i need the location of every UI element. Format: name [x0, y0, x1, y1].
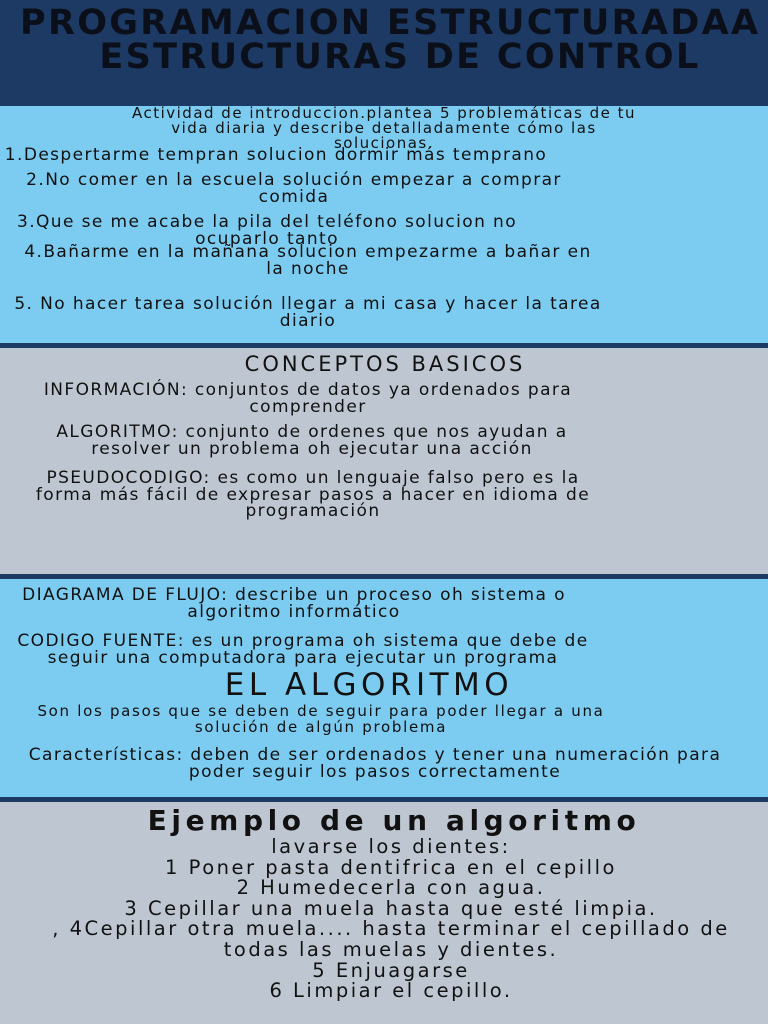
caracteristicas: poder seguir los pasos correctamente [189, 762, 561, 782]
panel: basic concepts [0, 348, 768, 575]
problem 2 [26, 170, 562, 206]
algoritmo [56, 422, 568, 458]
heading: ejemplo: Ejemplo de un algoritmo [148, 804, 640, 837]
example steps [52, 835, 730, 1002]
heading: conceptos basicos: CONCEPTOS BASICOS [245, 352, 525, 376]
example steps: 5 Enjuagarse [312, 959, 470, 982]
example steps: 1 Poner pasta dentifrica en el cepillo [165, 856, 617, 879]
problem 4: la noche [266, 258, 350, 278]
problem 2: 2.No comer en la escuela solución empezar a comprar [26, 170, 562, 190]
problem 4 [24, 242, 592, 278]
pseudocodigo: programación [245, 501, 381, 521]
panel: flow diagram and algorithm [0, 579, 768, 798]
panel: algorithm example [0, 802, 768, 1024]
problem 5: 5. No hacer tarea solución llegar a mi casa y hacer la tarea [14, 294, 602, 314]
codigo fuente: CODIGO FUENTE: es un programa oh sistema que debe de [17, 631, 589, 651]
codigo fuente [17, 631, 589, 668]
problem 3: 3.Que se me acabe la pila del teléfono solucion no [17, 212, 517, 232]
algoritmo: resolver un problema oh ejecutar una acción [91, 438, 533, 458]
example steps: todas las muelas y dientes. [224, 938, 558, 961]
problem 5 [14, 294, 602, 330]
problem 3: ocuparlo tanto [195, 228, 339, 248]
heading: el algoritmo: EL ALGORITMO [225, 667, 513, 703]
caracteristicas: Características: deben de ser ordenados y tener una numeración para [29, 745, 721, 765]
definition [37, 702, 605, 736]
intro text: vida diaria y describe detalladamente cómo las [171, 119, 597, 137]
problem 4: 4.Bañarme en la mañana solucion empezarme a bañar en [24, 242, 592, 262]
problem 3 [17, 212, 517, 248]
diagrama de flujo: DIAGRAMA DE FLUJO: describe un proceso oh sistema o [22, 585, 566, 605]
diagrama de flujo: algoritmo informático [187, 602, 401, 622]
panel: introduction activity [0, 106, 768, 344]
codigo fuente: seguir una computadora para ejecutar un programa [48, 648, 558, 668]
intro text [132, 104, 636, 152]
definition: Son los pasos que se deben de seguir para poder llegar a una [37, 702, 605, 720]
definition: solución de algún problema [195, 718, 447, 736]
pseudocodigo: PSEUDOCODIGO: es como un lenguaje falso pero es la [46, 468, 580, 488]
example steps: lavarse los dientes: [271, 835, 511, 858]
header panel [0, 0, 768, 106]
informacion: comprender [249, 396, 367, 416]
example steps: 6 Limpiar el cepillo. [269, 979, 513, 1002]
intro text: Actividad de introduccion.plantea 5 problemáticas de tu [132, 104, 636, 122]
problem 5: diario [280, 310, 336, 330]
caracteristicas [29, 745, 721, 782]
title [20, 3, 760, 77]
informacion: INFORMACIÓN: conjuntos de datos ya ordenados para [44, 380, 572, 400]
title: ESTRUCTURAS DE CONTROL [99, 37, 701, 77]
pseudocodigo: forma más fácil de expresar pasos a hacer en idioma de [36, 484, 590, 504]
problem 2: comida [259, 186, 329, 206]
title: PROGRAMACION ESTRUCTURADAA [20, 3, 760, 43]
example steps: 3 Cepillar una muela hasta que esté limpia. [124, 897, 658, 920]
diagrama de flujo [22, 585, 566, 622]
intro text: solucionas. [334, 134, 434, 152]
algoritmo: ALGORITMO: conjunto de ordenes que nos ayudan a [56, 422, 568, 442]
pseudocodigo [36, 468, 590, 521]
example steps: , 4Cepillar otra muela.... hasta terminar el cepillado de [52, 917, 730, 940]
example steps: 2 Humedecerla con agua. [237, 876, 545, 899]
problem 1: 1.Despertarme tempran solucion dormir más temprano [5, 145, 547, 165]
informacion [44, 379, 572, 416]
